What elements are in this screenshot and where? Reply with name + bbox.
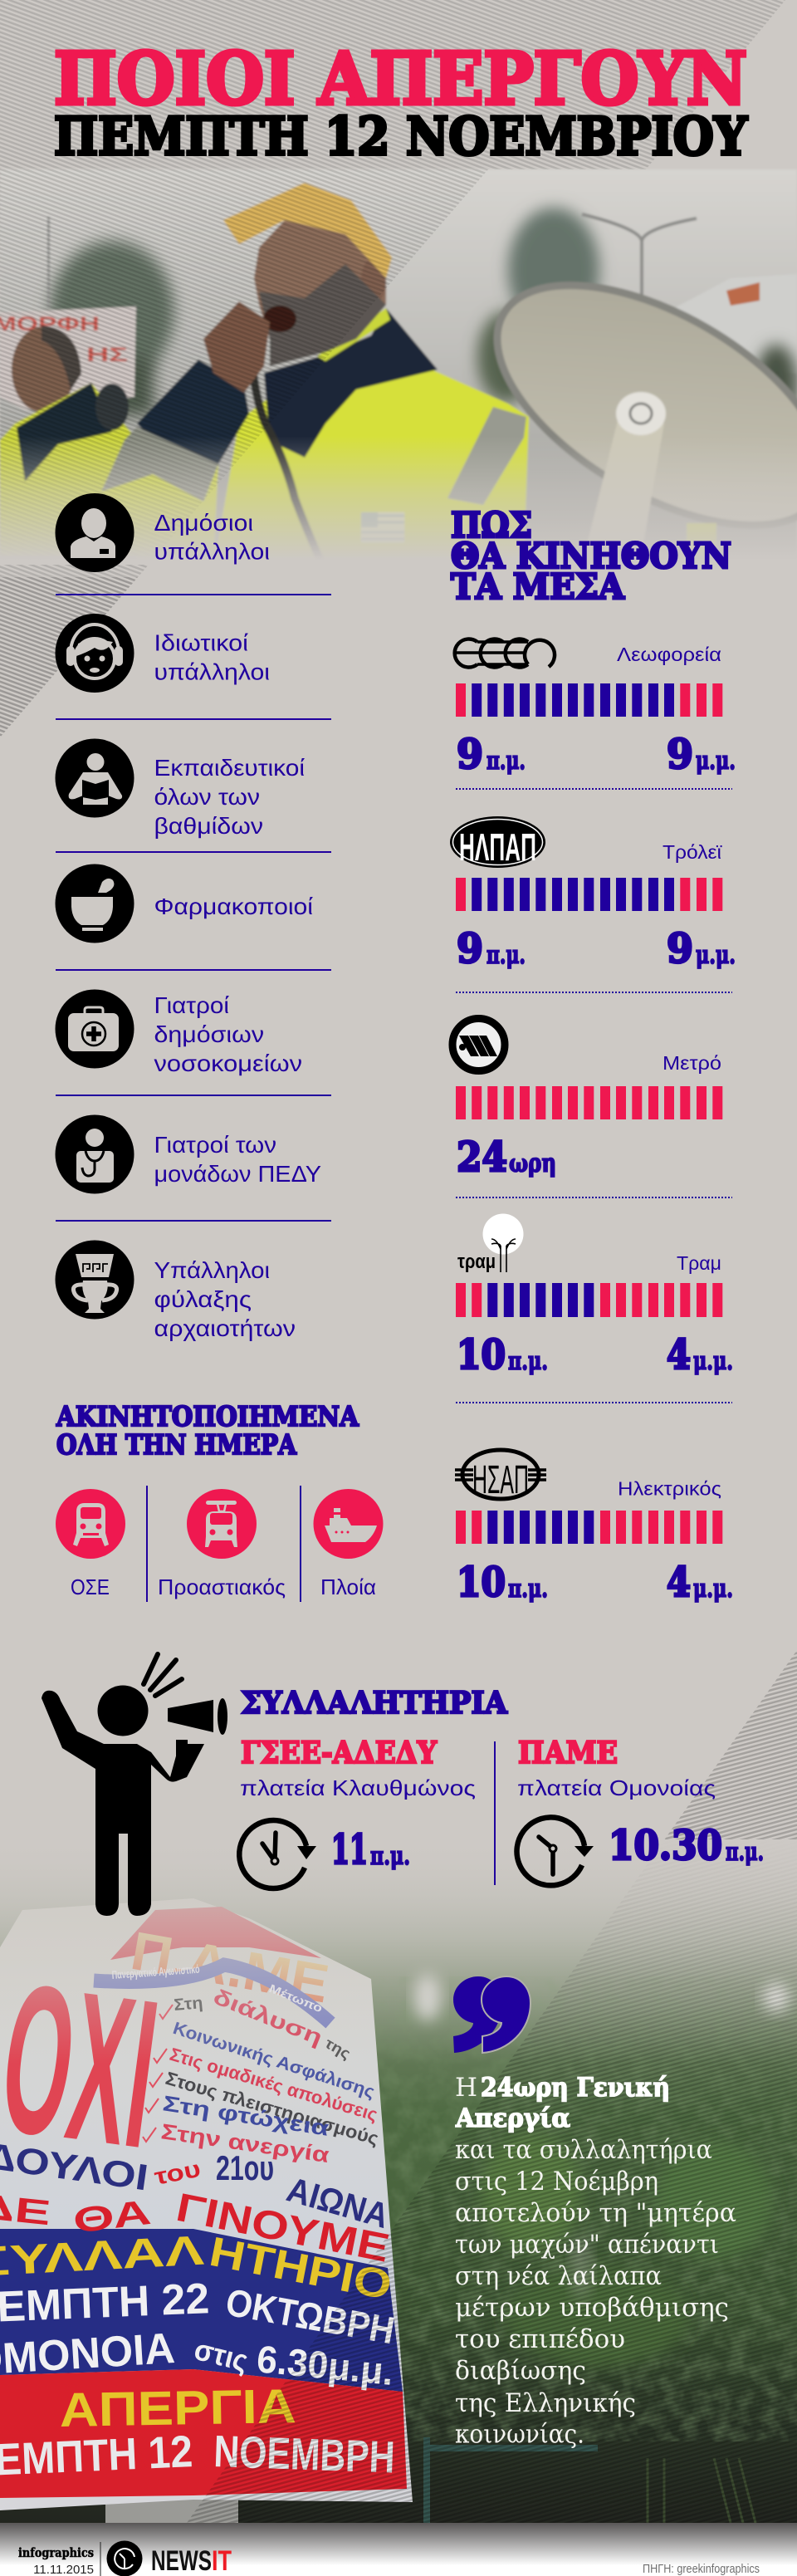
- quote text: των μαχών" απέναντι: [455, 2230, 719, 2260]
- item: teachers: Εκπαιδευτικοί: [154, 755, 305, 781]
- quote text: και τα συλλαλητήρια: [455, 2135, 712, 2165]
- poster rally details: ΑΠΕΡΓΙΑ: [59, 2379, 296, 2437]
- quote text: της Ελληνικής: [455, 2388, 636, 2418]
- item: private employees: υπάλληλοι: [154, 659, 270, 685]
- poster: [0, 1898, 413, 2510]
- poster rally details: 6.30μ.μ.: [255, 2337, 395, 2393]
- heading: immobilised all day: ΟΛΗ ΤΗΝ ΗΜΕΡΑ: [56, 1428, 296, 1461]
- hours: electric railway: [457, 1558, 733, 1606]
- lower photo fade from background: [0, 1839, 797, 2064]
- quote text: Απεργία: [455, 2103, 570, 2133]
- panel: tram: [456, 1214, 733, 1379]
- icon: clock 10.30am: [517, 1817, 594, 1885]
- item: public employees: [55, 493, 270, 572]
- rally: GSEE-ADEDY: ΓΣΕΕ-ΑΔΕΔΥ: [241, 1736, 438, 1770]
- footer: infographics credit: [18, 2545, 94, 2576]
- quote text: [455, 2073, 736, 2450]
- poster list: Στους πλειστηριασμούς: [164, 2068, 381, 2149]
- hours: tram: 10: [457, 1330, 506, 1379]
- heading: how transport runs: ΤΑ ΜΕΣΑ: [451, 566, 625, 607]
- hours: trolleys: [457, 924, 736, 972]
- hours: buses: 9: [457, 730, 483, 778]
- hours: metro: [457, 1133, 556, 1181]
- time: 11am: 11: [331, 1825, 368, 1873]
- icon: train, OSE: ΟΣΕ: [71, 1574, 110, 1599]
- poster slogan: 21ου: [216, 2148, 274, 2187]
- title: [54, 37, 748, 167]
- main worker head, cap and hand: [203, 183, 392, 393]
- hours: trolleys: 9: [457, 924, 483, 972]
- panel: metro: [452, 1018, 722, 1181]
- quote text: μέτρων υποβάθμισης: [455, 2293, 729, 2323]
- quote text: διαβίωσης: [455, 2356, 586, 2386]
- item: public hospital doctors: Γιατροί: [154, 992, 229, 1018]
- poster rally details: ΝΟΕΜΒΡΗ: [213, 2427, 396, 2483]
- footer: newsit logo: IT: [212, 2545, 232, 2576]
- protest sign: [0, 306, 136, 410]
- icon: clock 11am: [239, 1820, 316, 1888]
- left worker: [0, 326, 224, 556]
- hours: electric railway: 4: [667, 1558, 691, 1606]
- footer: newsit logo: NEWS: [151, 2545, 212, 2576]
- title: ΠΟΙΟΙ ΑΠΕΡΓΟΥΝ: [54, 37, 747, 121]
- poster list: [159, 1984, 381, 2167]
- megaphone: [458, 236, 797, 575]
- item: PEDY doctors: [55, 1114, 321, 1194]
- icon: ship: [314, 1489, 384, 1599]
- panel: metro: Μετρό: [663, 1052, 721, 1074]
- icon: train, OSE: [56, 1489, 125, 1599]
- icon: person with megaphone: [42, 1654, 227, 1916]
- schedule bar: tram: [456, 1283, 722, 1317]
- hours: tram: 4: [667, 1330, 691, 1379]
- photo: union worker with megaphone: [0, 169, 797, 575]
- logo: ISAP: ΗΣΑΠ: [472, 1458, 529, 1502]
- hours: trolleys: μ.μ.: [696, 941, 736, 970]
- time: 11am: π.μ.: [370, 1842, 410, 1871]
- panel: trolleys: Τρόλεϊ: [663, 841, 722, 863]
- panel: tram: Τραμ: [677, 1252, 721, 1274]
- poster check marks: [143, 2005, 173, 2142]
- item: pharmacists: [55, 864, 313, 943]
- hours: electric railway: μ.μ.: [693, 1574, 733, 1604]
- item: antiquities guards: Υπάλληλοι: [154, 1257, 270, 1283]
- poster rally details: ΟΚΤΩΒΡΗ: [222, 2280, 398, 2352]
- poster slogan: ΓΙΝΟΥΜΕ: [173, 2186, 393, 2271]
- item: teachers: [55, 739, 305, 839]
- item: private employees: [55, 614, 270, 693]
- item: pharmacists: Φαρμακοποιοί: [154, 894, 313, 919]
- logo: ILPAP: ΗΛΠΑΠ: [459, 825, 536, 869]
- icon: suburban rail: [158, 1489, 286, 1599]
- item: teachers: βαθμίδων: [154, 813, 263, 839]
- stripes over photo: [0, 169, 488, 737]
- poster slogan: του: [152, 2156, 203, 2190]
- hours: buses: μ.μ.: [696, 747, 736, 776]
- poster: ΟΧΙ: [0, 1939, 169, 2193]
- poster list: Στις ομαδικές απολύσεις: [168, 2044, 380, 2125]
- quote text: αποτελούν τη "μητέρα: [455, 2198, 736, 2228]
- footer: infographics credit: infographics: [18, 2545, 94, 2560]
- heading: rallies: ΣΥΛΛΑΛΗΤΗΡΙΑ: [241, 1686, 508, 1721]
- hours: tram: π.μ.: [508, 1347, 548, 1376]
- poster slogan: [0, 2135, 394, 2271]
- logo: ISAP: [455, 1450, 546, 1502]
- item: PEDY doctors: μονάδων ΠΕΔΥ: [154, 1161, 321, 1187]
- item: antiquities guards: φύλαξης: [154, 1286, 252, 1312]
- hours: tram: [457, 1330, 733, 1379]
- heading: how transport runs: [451, 505, 731, 607]
- quote text: Η: [455, 2073, 477, 2103]
- logo: tram: [457, 1214, 523, 1273]
- time: 10.30am: π.μ.: [726, 1838, 764, 1867]
- schedule bar: metro: [456, 1086, 722, 1119]
- item: antiquities guards: αρχαιοτήτων: [154, 1315, 296, 1341]
- hours: electric railway: π.μ.: [508, 1574, 548, 1604]
- rally: PAME: ΠΑΜΕ: [518, 1736, 618, 1770]
- quote text: κοινωνίας.: [455, 2420, 584, 2450]
- stripes below photo: [0, 565, 149, 737]
- hours: metro: 24: [457, 1133, 507, 1181]
- greek flag patch: [361, 512, 404, 542]
- rally: GSEE-ADEDY: [239, 1736, 476, 1888]
- quote text: στη νέα λαίλαπα: [455, 2261, 662, 2291]
- schedule bar: electric railway: [456, 1511, 722, 1544]
- hours: trolleys: π.μ.: [487, 941, 526, 970]
- time: 10.30am: 10.30: [609, 1821, 722, 1869]
- poster list: Στη φτώχεια: [161, 2090, 330, 2141]
- logo: ETHEL: [453, 639, 555, 668]
- poster slogan: ΑΙΩΝΑ: [283, 2169, 394, 2236]
- logo: metro: [452, 1018, 505, 1071]
- hours: metro: ωρη: [509, 1149, 556, 1178]
- poster list: Στην ανεργία: [159, 2118, 330, 2167]
- hours: buses: 9: [667, 730, 693, 778]
- panel: electric railway: Ηλεκτρικός: [618, 1478, 721, 1500]
- striped header background: [0, 0, 785, 169]
- schedule bar: buses: [456, 683, 722, 717]
- icon: quotation mark: [453, 1976, 531, 2053]
- poster rally details: ΗΤΗΡΙΟ: [206, 2228, 396, 2309]
- photo: PAME poster and trees: [0, 1844, 797, 2525]
- quote text: του επιπέδου: [455, 2324, 625, 2354]
- poster rally details: [0, 2227, 398, 2486]
- logo: tram: τραμ: [457, 1251, 496, 1273]
- footer: [0, 2523, 797, 2576]
- poster PAME logo: Πανεργατικό Αγωνιστικό: [111, 1962, 200, 1981]
- item: public hospital doctors: [55, 990, 302, 1076]
- rally: GSEE-ADEDY: πλατεία Κλαυθμώνος: [240, 1775, 476, 1800]
- poster PAME logo: Π.Α.ΜΕ: [127, 1920, 334, 2014]
- hours: electric railway: 10: [457, 1558, 506, 1606]
- poster slogan: ΘΑ: [71, 2192, 153, 2241]
- poster rally details: στις: [191, 2332, 252, 2378]
- heading: how transport runs: ΘΑ ΚΙΝΗΘΟΥΝ: [451, 536, 731, 576]
- footer: clock logo: [106, 2541, 143, 2576]
- protest sign: ΗΣ: [86, 344, 128, 366]
- stripes over lower photo: [187, 1650, 797, 2523]
- heading: immobilised all day: [56, 1400, 359, 1461]
- poster bands: [0, 2229, 403, 2392]
- photo fade into background: [0, 436, 797, 577]
- item: public hospital doctors: δημόσιων: [154, 1021, 264, 1047]
- quote text: στις 12 Νοέμβρη: [455, 2167, 658, 2196]
- panel: buses: Λεωφορεία: [617, 644, 721, 665]
- icon: ship: Πλοία: [320, 1574, 376, 1599]
- panel: trolleys: [450, 816, 736, 972]
- main worker jacket and vest: [101, 308, 529, 568]
- poster list: διάλυση: [210, 1984, 326, 2050]
- rally: PAME: [517, 1736, 764, 1885]
- item: PEDY doctors: Γιατροί των: [154, 1132, 276, 1158]
- hours: buses: π.μ.: [487, 747, 526, 776]
- item: public employees: υπάλληλοι: [154, 538, 270, 565]
- heading: how transport runs: ΠΩΣ: [451, 505, 532, 546]
- heading: immobilised all day: ΑΚΙΝΗΤΟΠΟΙΗΜΕΝΑ: [56, 1400, 359, 1432]
- logo: ILPAP: [450, 816, 545, 869]
- rally: PAME: πλατεία Ομονοίας: [517, 1775, 716, 1800]
- poster list: της: [322, 2035, 354, 2062]
- panel: buses: [453, 639, 736, 778]
- hours: trolleys: 9: [667, 924, 693, 972]
- poster list: Στη: [174, 1994, 203, 2015]
- schedule bar: trolleys: [456, 878, 722, 911]
- quote text: 24ωρη Γενική: [481, 2073, 670, 2103]
- item: public hospital doctors: νοσοκομείων: [154, 1050, 302, 1076]
- poster PAME logo: Μέτωπο: [267, 1981, 325, 2015]
- poster PAME logo: [94, 1907, 334, 2023]
- panel: electric railway: [455, 1450, 733, 1606]
- panel: who is striking: [55, 493, 331, 1341]
- hours: tram: μ.μ.: [693, 1347, 733, 1376]
- item: public employees: Δημόσιοι: [154, 510, 253, 536]
- item: teachers: όλων των: [154, 784, 260, 810]
- item: antiquities guards: [55, 1241, 296, 1341]
- hours: buses: [457, 730, 736, 778]
- item: private employees: Ιδιωτικοί: [154, 630, 248, 656]
- poster list: Κοινωνικής Ασφάλισης: [170, 2019, 377, 2102]
- icon: suburban rail: Προαστιακός: [158, 1574, 286, 1599]
- footer: source: ΠΗΓΗ: greekinfographics: [643, 2562, 760, 2576]
